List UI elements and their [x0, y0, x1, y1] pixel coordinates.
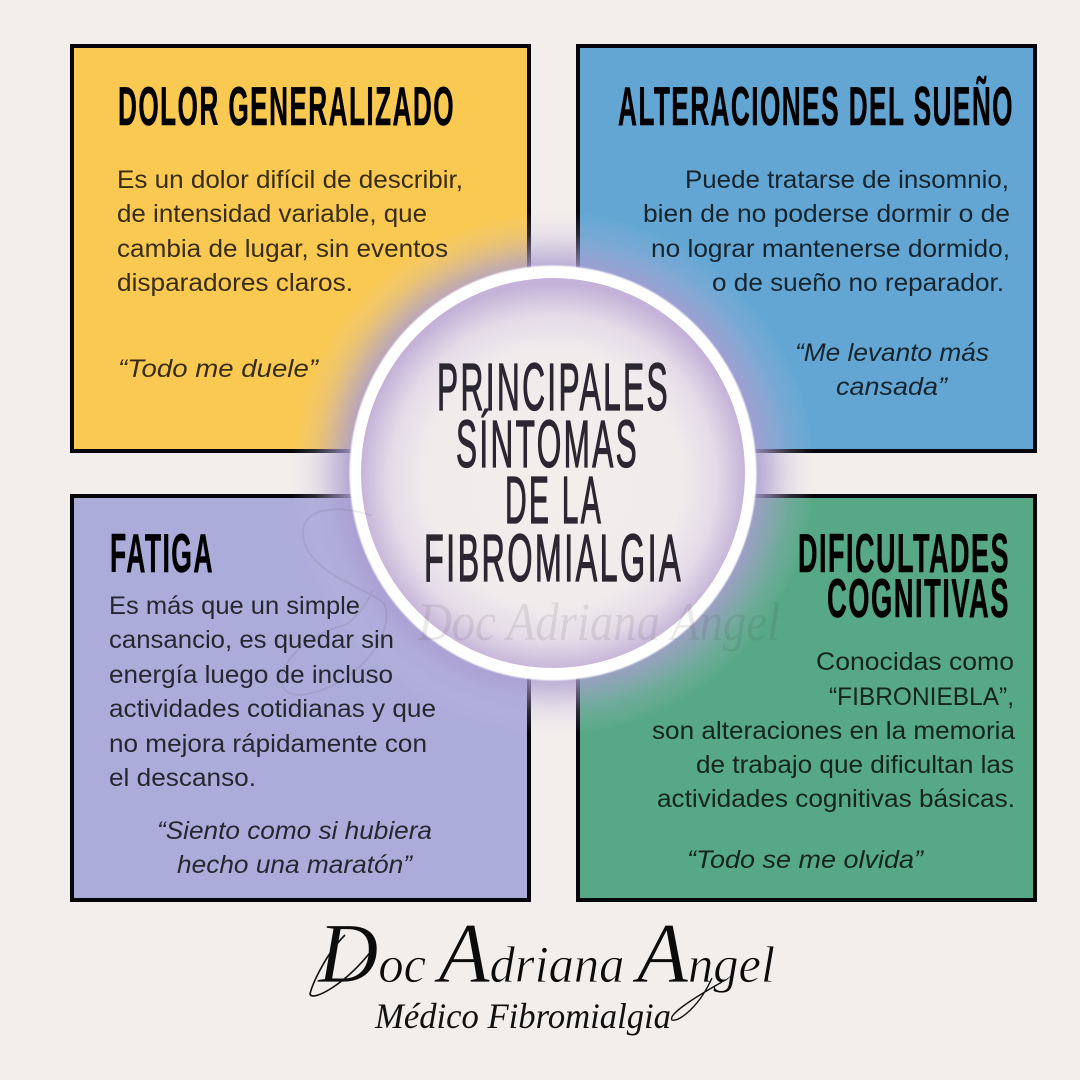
purple glow around the central circle [291, 211, 815, 735]
text block: fatiga description: el descanso. [109, 764, 256, 792]
panel: dolor generalizado [70, 44, 531, 453]
panel backgrounds [72, 46, 1035, 900]
text block: sueño description [643, 166, 1010, 297]
inner disc [361, 278, 745, 668]
quote: me levanto más cansada [795, 339, 989, 401]
text block: sueño description: no lograr mantenerse dormido, [651, 235, 1010, 263]
subtitle: médico fibromialgia: Médico Fibromialgia [374, 996, 671, 1036]
panel: dolor generalizado: DOLOR GENERALIZADO [118, 75, 455, 137]
text block: fatiga description: energía luego de incluso [109, 661, 393, 689]
panel: fatiga [70, 494, 531, 902]
text block: dolor description: Es un dolor difícil de describir, [117, 166, 463, 194]
flourish: D swash [310, 935, 372, 996]
text block: cognitivas description: “FIBRONIEBLA”, [829, 683, 1014, 711]
central title: SÍNTOMAS [456, 407, 639, 482]
flourish: g tail [672, 978, 722, 1020]
text block: dolor description: de intensidad variable, que [117, 200, 427, 228]
text block: cognitivas description [652, 648, 1015, 813]
text block: fatiga description: no mejora rápidamente con [109, 730, 427, 758]
panel: dificultades cognitivas [576, 494, 1037, 902]
quote: siento como si hubiera hecho una maratón: hecho una maratón” [177, 851, 414, 879]
quote: me levanto más cansada: cansada” [836, 373, 949, 401]
text block: dolor description: cambia de lugar, sin eventos [117, 235, 448, 263]
signature: doc adriana angel: Doc Adriana Angel [317, 905, 775, 1001]
panel: alteraciones del sueño [576, 44, 1037, 453]
quote: todo se me olvida: “Todo se me olvida” [687, 846, 925, 874]
text block: fatiga description: Es más que un simple [109, 592, 360, 620]
text block: fatiga description: cansancio, es quedar sin [109, 626, 394, 654]
text block: sueño description: bien de no poderse dormir o de [643, 200, 1010, 228]
central circle [350, 266, 756, 680]
text block: dolor description [117, 166, 463, 297]
central circle: PRINCIPALES [437, 350, 670, 425]
quote: todo me duele: “Todo me duele” [118, 355, 320, 383]
central title [424, 350, 683, 596]
white ring [350, 266, 756, 680]
text block: fatiga description [109, 592, 436, 792]
central circle: FIBROMIALGIA [424, 521, 683, 596]
watermark: doc adriana angel [281, 509, 780, 695]
text block: sueño description: o de sueño no reparador. [712, 269, 1004, 297]
text block: fatiga description: actividades cotidianas y que [109, 695, 436, 723]
quote: siento como si hubiera hecho una maratón [157, 817, 432, 879]
panel: fatiga: FATIGA [110, 522, 214, 584]
watermark: doc adriana angel: Doc Adriana Angel [417, 592, 780, 652]
central title: DE LA [505, 463, 603, 538]
quote: siento como si hubiera hecho una maratón: “Siento como si hubiera [157, 817, 432, 845]
text block: dolor description: disparadores claros. [117, 269, 353, 297]
text block: cognitivas description: de trabajo que dificultan las [696, 751, 1014, 779]
quote: me levanto más cansada: “Me levanto más [795, 339, 989, 367]
text block: cognitivas description: Conocidas como [816, 648, 1014, 676]
text block: cognitivas description: actividades cognitivas básicas. [657, 785, 1015, 813]
text block: sueño description: Puede tratarse de insomnio, [685, 166, 1009, 194]
text block: cognitivas description: son alteraciones en la memoria [652, 717, 1015, 745]
heading: dificultades cognitivas [798, 522, 1010, 629]
